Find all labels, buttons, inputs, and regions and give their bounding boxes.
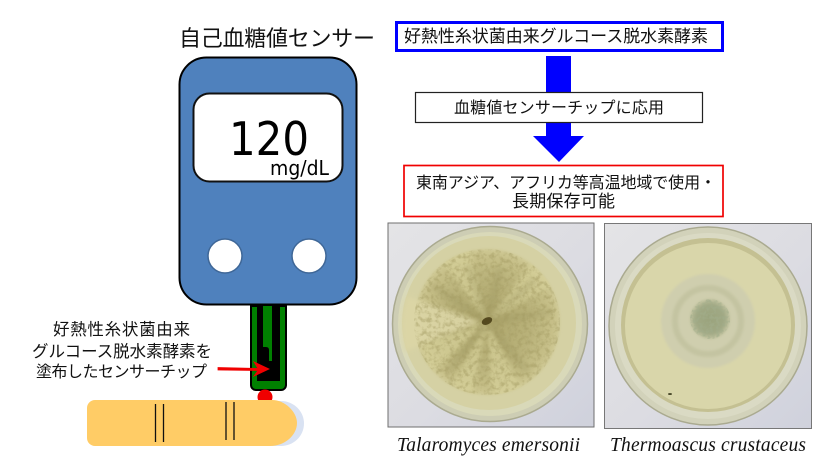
chip label: グルコース脱水素酵素を	[32, 342, 212, 361]
meter screen	[194, 94, 342, 182]
icon: blood glucose meter	[180, 58, 356, 304]
meter body	[180, 58, 356, 304]
arrow: chip to use	[533, 122, 584, 162]
box: enzyme: 好熱性糸状菌由来グルコース脱水素酵素	[404, 27, 708, 46]
box: benefits: 東南アジア、アフリカ等高温地域で使用・	[416, 174, 716, 192]
caption: Talaromyces emersonii: Talaromyces emersonii	[397, 435, 580, 456]
box: sensor chip application	[416, 92, 702, 122]
icon: finger	[87, 400, 304, 446]
box: benefits: 長期保存可能	[512, 192, 615, 211]
chip label: 塗布したセンサーチップ	[36, 363, 207, 381]
chip label	[32, 320, 212, 381]
reading: 120: 120	[229, 112, 309, 166]
arrow: label to chip	[218, 362, 269, 376]
right button	[292, 239, 326, 273]
unit: mg/dL: mg/dL	[270, 156, 330, 180]
photo: Thermoascus crustaceus plate	[604, 224, 812, 428]
inoculation point	[481, 316, 493, 326]
left button	[208, 239, 242, 273]
speck	[668, 393, 672, 395]
icon: sensor chip	[251, 306, 286, 390]
photo: Talaromyces emersonii plate	[388, 223, 594, 427]
icon: blood drop	[258, 390, 272, 404]
title: 自己血糖値センサー	[179, 26, 375, 51]
box: enzyme	[396, 22, 722, 50]
caption: Thermoascus crustaceus: Thermoascus crustaceus	[610, 435, 806, 456]
box: benefits	[404, 166, 723, 216]
chip label: 好熱性糸状菌由来	[53, 320, 190, 339]
arrow: enzyme to chip	[546, 56, 571, 93]
box: sensor chip application: 血糖値センサーチップに応用	[454, 99, 664, 117]
